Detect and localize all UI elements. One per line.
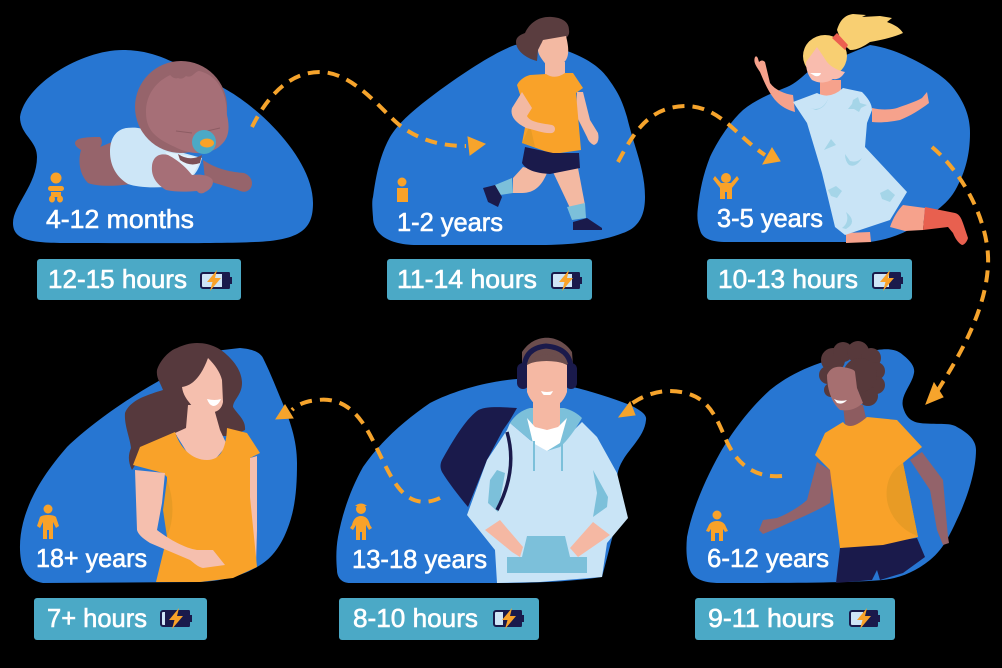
blob background [336, 379, 646, 583]
age label: 1-2 years [397, 207, 503, 237]
illustration: running child [483, 17, 602, 230]
icon: battery [161, 608, 192, 629]
icon: adult with tie [37, 504, 59, 539]
sleep hours pill [339, 598, 539, 640]
age label: 18+ years [36, 543, 147, 573]
icon: battery [201, 270, 232, 291]
illustration: child with yellow shirt [759, 341, 949, 583]
blob background [372, 43, 645, 245]
sleep hours pill: 11-14 hours [397, 264, 537, 294]
sleep hours pill: 12-15 hours [48, 264, 187, 294]
sleep hours pill: 7+ hours [47, 603, 147, 633]
age label: 3-5 years [717, 203, 823, 233]
age label: 13-18 years [352, 544, 487, 574]
icon: toddler figure [397, 178, 408, 202]
sleep hours pill [37, 259, 241, 300]
sleep hours pill: 8-10 hours [353, 603, 478, 633]
icon: child with raised arms [713, 173, 739, 199]
icon: battery [494, 608, 524, 629]
arrow: 4-12 months to 1-2 years [252, 72, 485, 155]
arrow: 3-5 years to 6-12 years [926, 147, 988, 404]
sleep hours pill [707, 259, 912, 300]
sleep hours pill [695, 598, 895, 640]
panel: 6-12 years [686, 341, 976, 640]
sleep hours pill: 10-13 hours [718, 264, 858, 294]
age label: 6-12 years [707, 543, 829, 573]
blob background [13, 50, 313, 243]
blob background [20, 348, 297, 583]
sleep hours pill: 9-11 hours [708, 603, 834, 633]
illustration: baby [75, 61, 252, 193]
panel: 4-12 months [13, 50, 313, 300]
icon: battery [552, 270, 582, 291]
panel: 18+ years [20, 343, 297, 640]
blob background [697, 45, 970, 242]
icon: teen with cap [350, 504, 372, 540]
arrow: 1-2 years to 3-5 years [618, 106, 780, 164]
age label: 4-12 months [46, 204, 194, 234]
sleep hours pill [387, 259, 592, 300]
panel: 13-18 years [336, 338, 646, 640]
blob background [686, 349, 976, 583]
arrow: 6-12 years to 13-18 years [619, 391, 782, 476]
icon: battery [850, 608, 880, 629]
arrow: 13-18 years to 18+ years [276, 400, 440, 502]
icon: child figure [706, 510, 728, 541]
icon: battery [873, 270, 903, 291]
icon: baby figure [48, 172, 64, 202]
illustration: teenager with headphones [440, 338, 628, 583]
illustration: jumping girl [754, 14, 968, 245]
illustration: adult woman [125, 343, 260, 582]
panel: 3-5 years [697, 14, 970, 300]
sleep hours pill [34, 598, 207, 640]
panel: 1-2 years [372, 17, 645, 300]
